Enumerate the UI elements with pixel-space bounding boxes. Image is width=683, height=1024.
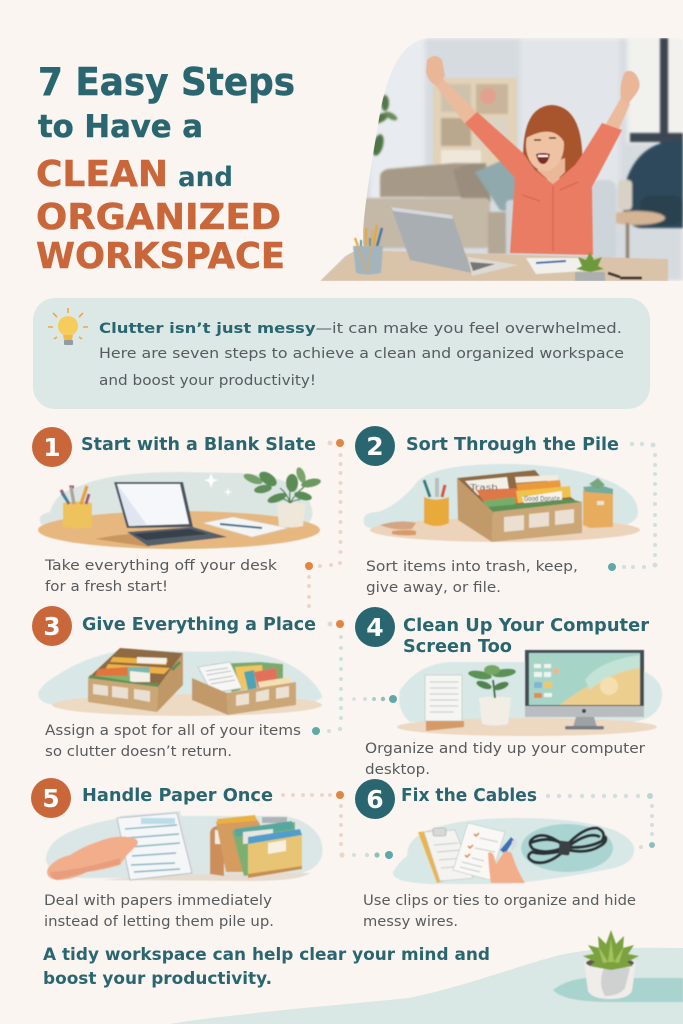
step 3 badge [32, 606, 72, 646]
step 1 text: for a fresh start! [45, 579, 168, 595]
footer message: A tidy workspace can help clear your mind and [43, 945, 490, 965]
illustration: sorting box with folders: Good Donate [524, 495, 560, 503]
step 6 badge [355, 779, 395, 819]
step 3 text [45, 723, 301, 760]
title: CLEAN [36, 154, 168, 195]
step 6 text: messy wires. [363, 914, 458, 930]
step 1 text [44, 558, 278, 595]
step 5 badge [31, 778, 71, 818]
step 6 text: Use clips or ties to organize and hide [363, 893, 636, 909]
step 4 text: Organize and tidy up your computer [365, 741, 645, 757]
step 1 badge: 1 [43, 433, 61, 462]
step 6 text [363, 893, 636, 930]
intro panel: Here are seven steps to achieve a clean and organized workspace [99, 346, 624, 362]
step 3 badge: 3 [43, 612, 61, 641]
step 4 badge [355, 607, 395, 647]
illustration: clipboard, checklist and tied cable [393, 818, 634, 884]
connector 5 [281, 791, 393, 859]
step 4 heading [403, 616, 649, 657]
step 5 text: instead of letting them pile up. [44, 914, 274, 930]
step 4 heading: Clean Up Your Computer [403, 616, 649, 636]
icon: succulent in white pot [553, 930, 683, 1002]
illustration: hand holding papers and file boxes [46, 811, 322, 881]
step 1 text: Take everything off your desk [44, 558, 278, 574]
illustration: tidy computer desktop [397, 650, 662, 736]
step 2 heading: Sort Through the Pile [406, 435, 619, 455]
icon: light bulb [48, 308, 88, 345]
illustration: sorting box with folders: Trash [469, 483, 498, 492]
step 2 text: give away, or file. [366, 580, 501, 596]
step 2 text [366, 559, 578, 596]
step 4 heading: Screen Too [403, 637, 512, 657]
title: ORGANIZED [36, 197, 281, 238]
footer message: boost your productivity. [43, 969, 272, 989]
step 3 heading: Give Everything a Place [82, 615, 316, 635]
step 3 text: Assign a spot for all of your items [45, 723, 301, 739]
step 2 badge: 2 [366, 432, 384, 461]
step 5 text: Deal with papers immediately [44, 893, 272, 909]
footer message [43, 945, 490, 989]
step 4 badge: 4 [366, 613, 384, 642]
title: 7 Easy Steps [38, 60, 295, 104]
step 5 heading: Handle Paper Once [82, 786, 273, 806]
illustration: storage boxes [38, 648, 322, 716]
illustration: laptop on clear desk [38, 466, 322, 549]
title: to Have a [38, 109, 203, 145]
hero photo: woman celebrating at a tidy desk [320, 38, 683, 281]
step 4 text [365, 741, 645, 778]
title: WORKSPACE [36, 236, 285, 277]
step 1 heading: Start with a Blank Slate [81, 435, 316, 455]
step 2 badge [355, 426, 395, 466]
connector 6 [546, 793, 655, 849]
connector 3 [312, 620, 344, 735]
connector 4 [352, 695, 397, 703]
connector 2 [608, 442, 658, 571]
footer wave [170, 948, 683, 1024]
step 1 badge [32, 427, 72, 467]
intro panel [33, 298, 650, 409]
title [36, 60, 295, 277]
step 6 badge: 6 [366, 785, 384, 814]
intro panel: and boost your productivity! [99, 373, 316, 389]
step 5 badge: 5 [42, 784, 60, 813]
title: and [178, 162, 233, 193]
step 2 text: Sort items into trash, keep, [366, 559, 578, 575]
intro panel: Clutter isn’t just messy —it can make you feel overwhelmed. [99, 321, 622, 337]
connector 1 [305, 439, 344, 608]
step 3 text: so clutter doesn’t return. [45, 744, 232, 760]
step 5 text [44, 893, 274, 930]
step 6 heading: Fix the Cables [401, 786, 537, 806]
illustration: sorting box with folders [364, 464, 640, 542]
step 4 text: desktop. [365, 762, 430, 778]
